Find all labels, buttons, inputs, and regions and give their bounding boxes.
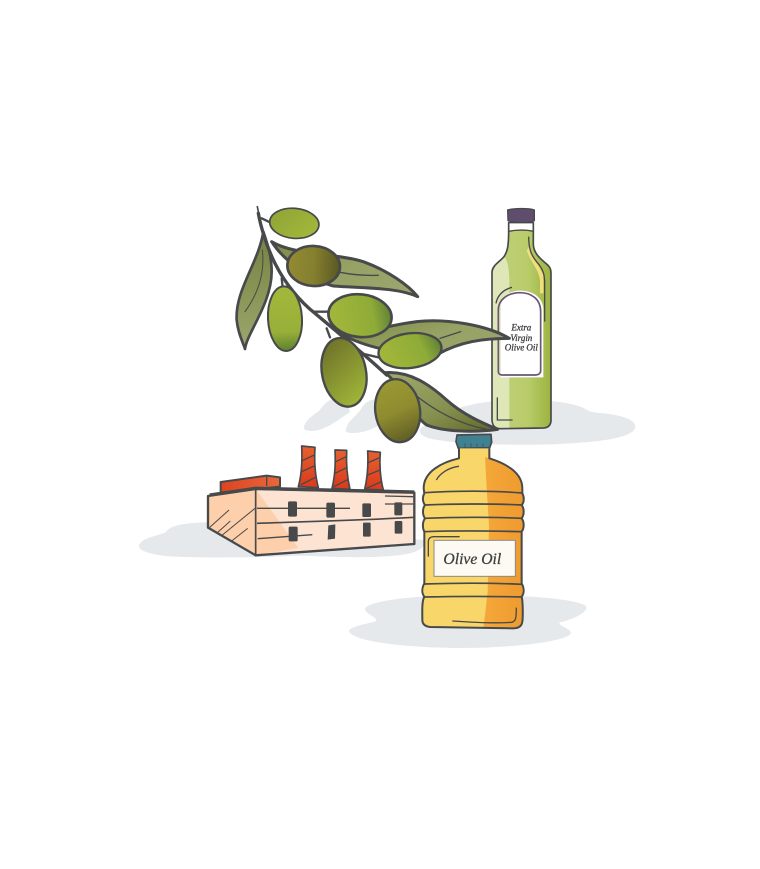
chimney stripes [301,455,382,488]
factory side wall [208,489,256,555]
factory windows [288,501,402,541]
glass bottle [492,208,551,429]
wall lines [210,496,414,541]
factory outline [208,489,414,555]
shadow: glass bottle and olives [304,397,635,445]
glass cap [508,208,534,223]
shadow: oil bottle [349,595,586,648]
glass label text: Extra [510,323,532,333]
leaf: left [237,232,272,349]
bottle outline [422,448,524,628]
shadow: factory [139,522,425,558]
glass label text: Virgin [510,333,533,343]
glass body [492,230,551,429]
roof block [221,476,280,493]
leaf: upper right [272,242,418,297]
bottle orange side [483,457,524,628]
plastic oil bottle [422,434,524,628]
glass highlight [492,257,509,428]
chimneys [298,446,383,490]
glass label [501,291,543,377]
branch stem [258,213,387,375]
olive branch [237,206,509,445]
label text: Olive Oil [443,551,501,568]
yellow reflection [527,247,543,293]
leaf: lower right [385,372,498,431]
olives [268,206,320,240]
glass outline [492,223,551,429]
factory [208,446,414,555]
bottle cap [456,434,492,448]
leaf: middle right [343,321,509,355]
glass label text [505,323,538,352]
glass label text: Olive Oil [505,342,538,352]
bottle label [434,540,515,576]
bottle neck [509,223,533,232]
factory front wall [256,489,414,555]
glass contour lines [496,230,545,420]
bottle rib lines [424,466,522,623]
bottle body [422,448,524,628]
